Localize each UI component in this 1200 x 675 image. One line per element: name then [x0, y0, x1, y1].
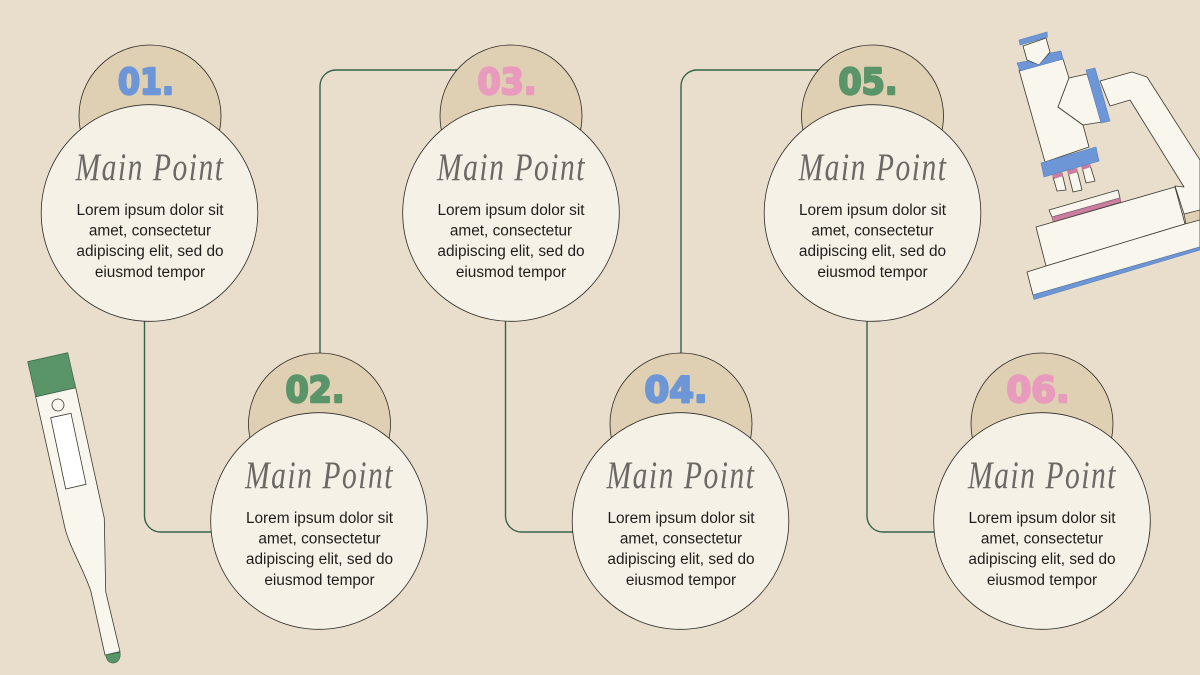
body 06: amet, consectetur — [981, 530, 1103, 548]
body 03: adipiscing elit, sed do — [437, 243, 585, 260]
body 02: adipiscing elit, sed do — [246, 551, 393, 568]
body 01: amet, consectetur — [89, 222, 211, 240]
number tab 03 — [440, 45, 582, 187]
heading 06: Main Point — [967, 454, 1117, 497]
body 01: Lorem ipsum dolor sit — [76, 202, 224, 219]
circle 05 — [764, 105, 981, 321]
body 02: amet, consectetur — [258, 530, 381, 548]
point 01 — [41, 45, 258, 321]
circle 03 — [403, 105, 619, 321]
microscope tube — [1019, 59, 1089, 162]
body 05: Lorem ipsum dolor sit — [799, 202, 947, 219]
number tab 04 — [610, 353, 752, 495]
microscope nosepiece — [1041, 147, 1099, 177]
body 03: amet, consectetur — [450, 222, 572, 240]
heading 02: Main Point — [244, 454, 394, 497]
point 05 — [764, 45, 981, 321]
number tab 05 — [802, 45, 944, 187]
body 06: Lorem ipsum dolor sit — [968, 510, 1116, 527]
microscope base — [1027, 220, 1200, 295]
connectors between points — [144, 70, 935, 532]
body 05: eiusmod tempor — [817, 264, 928, 281]
body 04: Lorem ipsum dolor sit — [607, 510, 755, 527]
microscope stage — [1049, 190, 1120, 217]
circle 06 — [934, 413, 1150, 629]
body 04: amet, consectetur — [620, 530, 742, 548]
number 06: 06. — [1006, 370, 1070, 411]
microscope objectives — [1053, 173, 1066, 191]
icon: microscope — [1017, 32, 1200, 300]
circle 01 — [41, 105, 258, 321]
body 05: adipiscing elit, sed do — [799, 243, 946, 260]
number tab 01 — [79, 45, 221, 187]
point 04 — [572, 353, 789, 629]
number tab 06 — [971, 353, 1113, 495]
body 03: Lorem ipsum dolor sit — [437, 202, 585, 219]
heading 03: Main Point — [436, 146, 586, 189]
body 02: Lorem ipsum dolor sit — [246, 510, 394, 527]
microscope eyepiece — [1023, 38, 1050, 65]
body 04: eiusmod tempor — [626, 572, 736, 589]
heading 05: Main Point — [798, 146, 948, 189]
point 03 — [403, 45, 619, 321]
number 04: 04. — [644, 370, 708, 411]
number 02: 02. — [286, 370, 344, 411]
number 03: 03. — [478, 62, 536, 103]
microscope arm — [1100, 72, 1200, 217]
number tab 02 — [248, 353, 390, 495]
body 05: amet, consectetur — [811, 222, 934, 240]
icon: thermometer — [28, 353, 120, 663]
circle 04 — [572, 413, 789, 629]
body 06: adipiscing elit, sed do — [968, 551, 1116, 568]
body 03: eiusmod tempor — [456, 264, 566, 281]
number 05: 05. — [838, 62, 898, 103]
number 01: 01. — [118, 62, 174, 103]
body 01: eiusmod tempor — [95, 264, 205, 281]
body 02: eiusmod tempor — [264, 572, 375, 589]
body 06: eiusmod tempor — [987, 572, 1097, 589]
circle 02 — [211, 413, 427, 629]
heading 04: Main Point — [606, 454, 756, 497]
body 01: adipiscing elit, sed do — [76, 243, 224, 260]
point 02 — [211, 353, 427, 629]
heading 01: Main Point — [75, 146, 224, 189]
point 06 — [934, 353, 1150, 629]
body 04: adipiscing elit, sed do — [607, 551, 755, 568]
